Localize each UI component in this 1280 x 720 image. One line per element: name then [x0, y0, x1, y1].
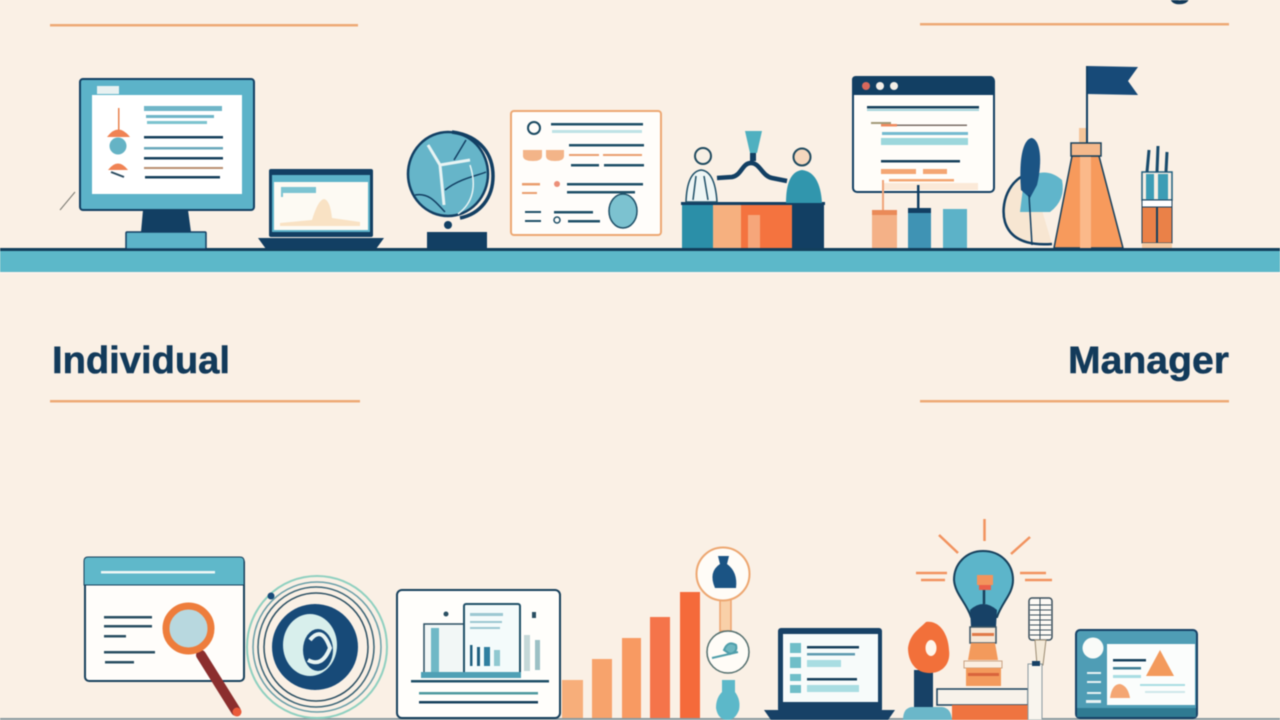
icon: two people at desk [681, 131, 825, 248]
icon: lightbulb with rays [916, 519, 1052, 686]
icon: window with magnifying glass [84, 557, 244, 716]
panel: devices card [397, 590, 560, 718]
heading: Individual: Individual [52, 340, 230, 382]
icon: microphone and ruler [1028, 598, 1052, 720]
icon: orange flower on pedestal [903, 622, 952, 720]
rules under bottom headings [50, 400, 1229, 402]
icon: pen cup [1142, 146, 1172, 248]
icon: chain of circles and flask [696, 548, 750, 720]
icon: laptop with lists [764, 628, 895, 720]
icon: desktop monitor [60, 79, 254, 249]
icon: tablet with triangle chart [1076, 630, 1197, 718]
icon: browser window [852, 76, 994, 192]
shelf [0, 248, 1280, 274]
chart: rising orange bars [562, 592, 700, 718]
heading: Manager: Manager [1068, 340, 1229, 382]
icon: globe [408, 132, 493, 249]
bottom edge line [0, 718, 1280, 720]
icon: flag on orange cone with figure [1004, 66, 1138, 248]
icon: books [937, 689, 1028, 720]
icon: three small columns [872, 180, 967, 248]
panel: document card with orange border [511, 111, 661, 235]
icon: concentric rings with globe [247, 576, 387, 718]
icon: small laptop [258, 169, 384, 249]
